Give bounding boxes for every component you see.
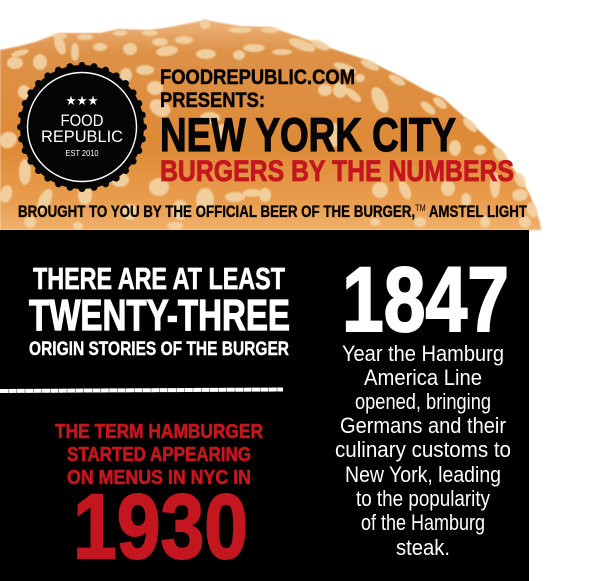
1847 description: Year the Hamburg (342, 341, 504, 366)
heading: PRESENTS: (160, 89, 265, 112)
1847 description: steak. (396, 535, 450, 560)
1847 description: of the Hamburg (361, 510, 485, 535)
logo stars: ★★★ (66, 93, 98, 108)
1847 description: America Line (364, 365, 482, 390)
presenter line: FOODREPUBLIC.COM (160, 66, 355, 89)
year 1847: 1847 (342, 249, 509, 351)
hamburger term block (55, 421, 263, 578)
subtitle: BURGERS BY THE NUMBERS (160, 155, 514, 188)
1847 description: opened, bringing (355, 389, 491, 414)
heading (18, 66, 527, 221)
main title: NEW YORK CITY (160, 108, 456, 161)
hamburger term block: ON MENUS IN NYC IN (67, 467, 251, 489)
sponsor line: BROUGHT TO YOU BY THE OFFICIAL BEER OF THE BURGER, (18, 203, 510, 221)
logo name: FOOD (60, 112, 104, 130)
1847 description: culinary customs to (335, 437, 511, 462)
year 1930: 1930 (73, 476, 248, 578)
black panel (0, 230, 529, 581)
logo badge: REPUBLIC (41, 128, 123, 146)
sponsor line: AMSTEL LIGHT (426, 203, 527, 221)
origin stories block: ORIGIN STORIES OF THE BURGER (29, 339, 289, 360)
1847 description: Germans and their (340, 413, 506, 438)
logo badge (20, 65, 144, 189)
1847 block (335, 249, 511, 560)
logo established date: EST 2010 (66, 149, 99, 158)
origin stories block: THERE ARE AT LEAST (33, 261, 285, 296)
divider (0, 390, 283, 391)
1847 description (335, 341, 511, 560)
origin stories block (29, 261, 290, 360)
hamburger term block: THE TERM HAMBURGER (55, 421, 263, 443)
sponsor line: TM (415, 203, 426, 213)
1847 description: to the popularity (356, 486, 491, 511)
hamburger bun (0, 19, 541, 230)
1847 description: New York, leading (345, 462, 501, 487)
origin stories block: TWENTY-THREE (29, 291, 290, 340)
hamburger term block: STARTED APPEARING (67, 444, 251, 466)
